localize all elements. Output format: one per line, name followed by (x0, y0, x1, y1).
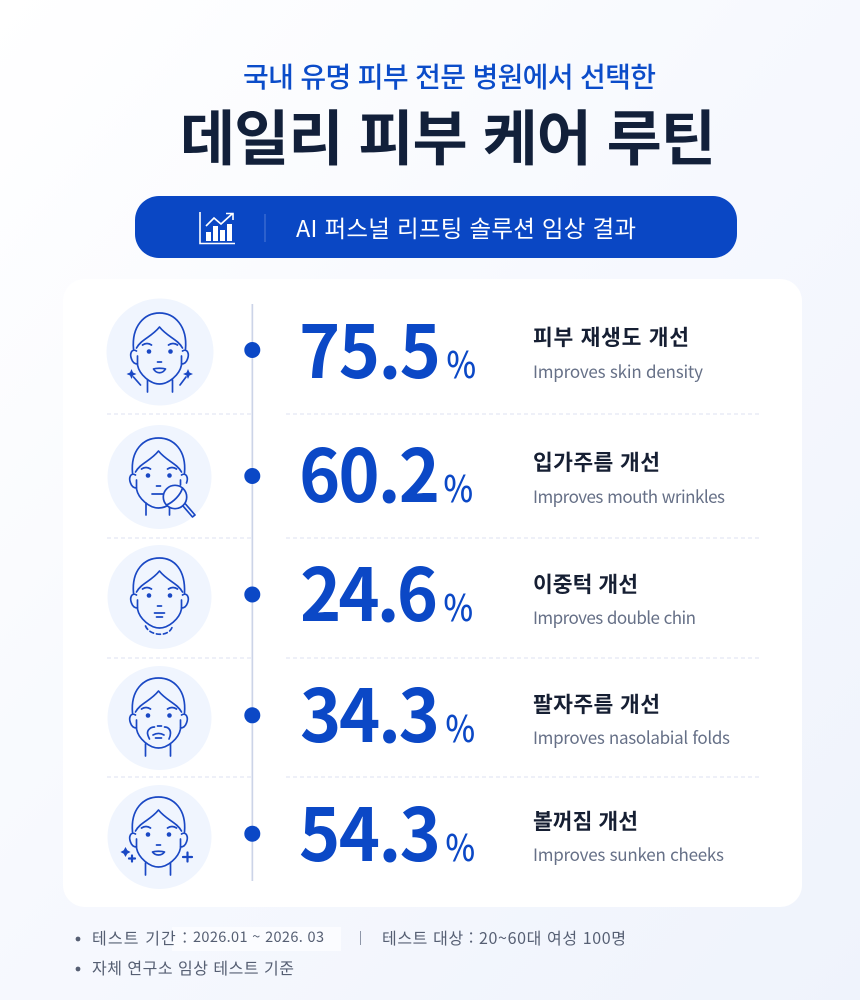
english label: Improves sunken cheeks (533, 841, 724, 866)
row: mouth wrinkles (108, 417, 725, 529)
icon: face with folds (108, 666, 212, 770)
icon: growth chart (200, 212, 235, 244)
percent: % (444, 578, 473, 632)
row: skin density (106, 293, 703, 406)
label: 입가주름 개선 (533, 446, 660, 477)
timeline dot (244, 826, 260, 842)
row: nasolabial folds (108, 657, 730, 770)
label: 이중턱 개선 (533, 568, 638, 599)
value: 75.5 (299, 293, 441, 399)
english label: Improves skin density (533, 358, 703, 383)
value: 54.3 (299, 776, 441, 882)
percent: % (446, 818, 475, 872)
icon: face with sparkles and plus (108, 785, 212, 889)
icon: face with sparkles (106, 298, 214, 406)
timeline dot (244, 468, 260, 484)
icon: face with dashed chin (108, 545, 212, 649)
row: double chin (108, 536, 696, 649)
english label: Improves double chin (533, 604, 696, 629)
timeline dot (244, 586, 260, 602)
timeline dot (244, 342, 260, 358)
footnotes (76, 925, 626, 979)
subtitle: 국내 유명 피부 전문 병원에서 선택한 (243, 56, 656, 96)
test period: 테스트 기간 : (92, 925, 187, 949)
row: sunken cheeks (108, 776, 724, 889)
percent: % (446, 699, 475, 753)
label: 피부 재생도 개선 (533, 321, 689, 352)
percent: % (446, 335, 476, 389)
value: 24.6 (300, 536, 438, 642)
title: 데일리 피부 케어 루틴 (180, 91, 716, 178)
label: 볼꺼짐 개선 (533, 805, 638, 836)
label: 팔자주름 개선 (533, 688, 660, 719)
english label: Improves mouth wrinkles (533, 483, 725, 508)
test subject: 테스트 대상 : 20~60대 여성 100명 (382, 925, 626, 949)
value: 34.3 (300, 657, 440, 763)
icon: face with magnifier (108, 425, 212, 529)
banner (135, 196, 737, 258)
test basis: 자체 연구소 임상 테스트 기준 (92, 955, 294, 979)
panel: results card (63, 279, 802, 907)
value: 60.2 (299, 417, 440, 523)
banner text: AI 퍼스널 리프팅 솔루션 임상 결과 (296, 210, 636, 244)
english label: Improves nasolabial folds (533, 724, 730, 749)
test dates: 2026.01 ~ 2026. 03 (193, 926, 324, 947)
percent: % (444, 459, 473, 513)
timeline dot (244, 707, 260, 723)
timeline line (252, 304, 253, 881)
